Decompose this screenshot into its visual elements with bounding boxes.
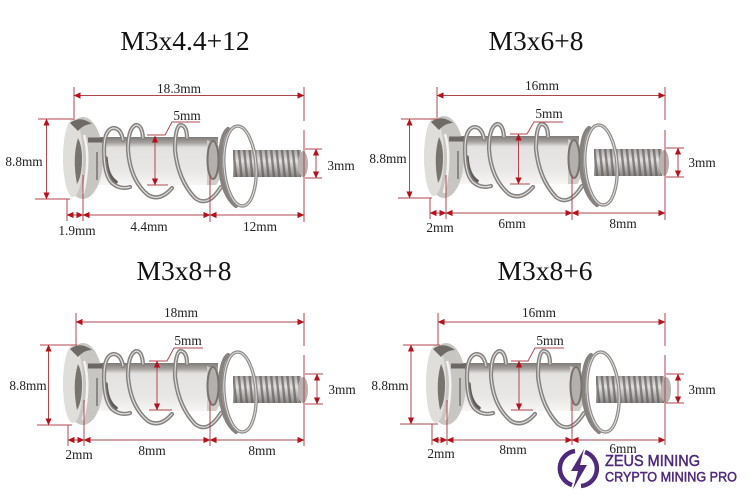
- dimension labels: 18.3mm: [157, 81, 202, 96]
- dimension labels: 2mm: [426, 220, 454, 235]
- dimension lines: [400, 313, 684, 445]
- dimension labels: 8.8mm: [371, 378, 409, 393]
- dimension labels: 3mm: [327, 158, 355, 173]
- dimension labels: 5mm: [174, 333, 202, 348]
- dimension labels: 8.8mm: [9, 378, 47, 393]
- dimension labels: 8mm: [248, 443, 276, 458]
- panel: M3x6+8: [369, 25, 716, 235]
- logo text: ZEUS MINING: [605, 453, 700, 470]
- icon: lightning ring: [560, 449, 597, 489]
- panel: M3x4.4+12: [5, 25, 355, 238]
- screw photo: M3x8+6: [426, 343, 671, 433]
- title: M3x4.4+12: M3x4.4+12: [120, 25, 250, 56]
- title: M3x8+8: M3x8+8: [137, 255, 231, 286]
- dimension lines: [37, 313, 323, 446]
- dimension labels: 8mm: [499, 442, 527, 457]
- logo: Zeus Mining: [560, 449, 737, 489]
- dimension labels: [9, 305, 356, 462]
- dimension labels: 2mm: [65, 447, 93, 462]
- dimension labels: 8.8mm: [369, 151, 407, 166]
- title: M3x6+8: M3x6+8: [489, 25, 583, 56]
- dimension labels: 6mm: [498, 216, 526, 231]
- dimension labels: 5mm: [536, 333, 564, 348]
- logo text: CRYPTO MINING PRO: [605, 470, 737, 484]
- screw photo: M3x8+8: [63, 343, 308, 433]
- dimension labels: [371, 305, 716, 461]
- dimension labels: 3mm: [688, 382, 716, 397]
- dimension lines: [398, 87, 684, 220]
- dimension labels: 12mm: [243, 219, 278, 234]
- logo text: [605, 453, 737, 484]
- panel: M3x8+6: [371, 255, 716, 461]
- dimension labels: [5, 81, 355, 238]
- dimension labels: 5mm: [173, 108, 201, 123]
- dimension labels: 8mm: [138, 443, 166, 458]
- dimension labels: [369, 78, 716, 235]
- dimension labels: 8.8mm: [5, 154, 43, 169]
- dimension labels: 3mm: [328, 382, 356, 397]
- title: M3x8+6: M3x8+6: [498, 255, 592, 286]
- dimension labels: 5mm: [535, 106, 563, 121]
- dimension labels: 18mm: [164, 305, 199, 320]
- screw photo: M3x6+8: [424, 116, 669, 206]
- dimension labels: 4.4mm: [130, 219, 168, 234]
- screw photo: M3x4.4+12: [63, 117, 308, 207]
- dimension labels: 16mm: [522, 305, 557, 320]
- dimension labels: 3mm: [688, 155, 716, 170]
- panel: M3x8+8: [9, 255, 356, 462]
- dimension labels: 1.9mm: [58, 223, 96, 238]
- dimension labels: 6mm: [609, 441, 637, 456]
- dimension labels: 2mm: [427, 446, 455, 461]
- dimension lines: [35, 87, 322, 222]
- dimension labels: 16mm: [525, 78, 560, 93]
- dimension labels: 8mm: [609, 216, 637, 231]
